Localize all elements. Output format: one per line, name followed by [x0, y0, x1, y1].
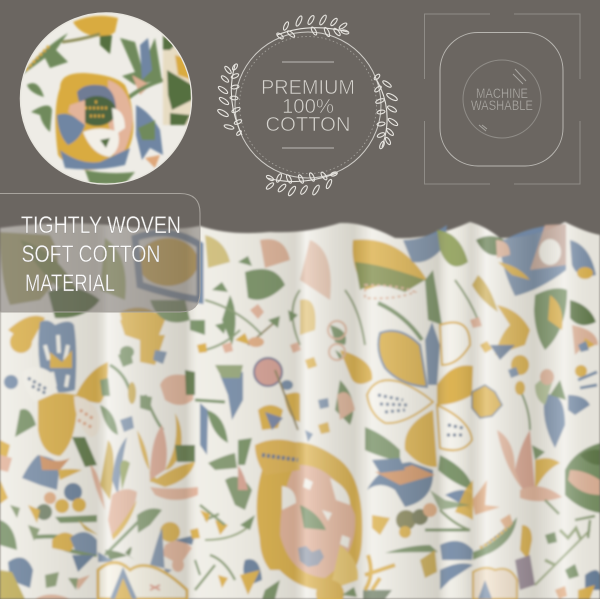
- floral: blue and pink flower bottom centre: [150, 522, 195, 575]
- wreath badge: premium cotton: [217, 14, 399, 197]
- floral: pink spotted leaf: [98, 489, 162, 562]
- badge: inner circle: [463, 60, 541, 138]
- floral: pink bird right: [472, 430, 562, 515]
- close-up: blue leaves right of flower: [136, 105, 163, 160]
- badge: rounded square: [440, 32, 563, 166]
- wreath: text: 100%: [282, 96, 334, 118]
- floral: large pink and yellow peony: [255, 439, 362, 599]
- panel: tightly woven callout: [0, 194, 200, 312]
- floral: ornate flower bottom: [98, 562, 187, 599]
- close-up: main yellow and pink flower: [55, 73, 133, 170]
- badge: text: [471, 86, 533, 113]
- circular fabric close-up: [20, 13, 193, 184]
- floral: bottom right cluster: [363, 480, 600, 599]
- callout text: [21, 212, 181, 297]
- floral: top foliage and blue bloom: [300, 224, 598, 375]
- badge: text: MACHINE: [476, 86, 528, 101]
- callout text: TIGHTLY WOVEN: [21, 212, 181, 239]
- floral: small flowers and green band left: [0, 483, 98, 599]
- floral: blue leaves under lily: [367, 455, 473, 510]
- floral: pink bird centre left: [137, 413, 198, 500]
- wreath: leaves top: [276, 14, 349, 40]
- wreath: leaves right: [373, 73, 399, 149]
- close-up: top yellow flower: [73, 16, 118, 36]
- curtain fold shading: [0, 222, 600, 599]
- floral: large yellow lily: [328, 303, 473, 467]
- wreath: text: COTTON: [266, 114, 350, 136]
- floral: blue and green leaves centre: [195, 365, 252, 510]
- wreath: leaves left: [217, 63, 242, 136]
- floral: purple flower and small blooms: [235, 322, 300, 430]
- close-up: right fold band: [163, 35, 193, 125]
- badge: machine washable: [424, 14, 580, 184]
- floral: blue leaves right: [515, 365, 597, 448]
- floral: green flower right: [565, 443, 600, 513]
- wreath: text: [261, 77, 355, 136]
- badge: outer bracket frame: [424, 14, 580, 184]
- floral: vertical striped stems: [90, 437, 130, 510]
- wreath: leaves bottom: [265, 171, 338, 197]
- callout text: SOFT COTTON: [22, 241, 160, 268]
- callout text: MATERIAL: [25, 270, 115, 297]
- floral: small yellow flower: [472, 385, 502, 418]
- floral: pink flower and stems centre left: [110, 320, 205, 430]
- close-up: right green leaves: [120, 38, 162, 85]
- floral: top band foliage under panel: [0, 232, 331, 345]
- wreath: text: PREMIUM: [261, 77, 355, 99]
- close-up: upper left green leaves: [22, 33, 68, 75]
- floral: sprigs lower middle: [195, 515, 280, 599]
- curtain photo with floral print: [0, 222, 600, 599]
- badge: text: WASHABLE: [471, 98, 533, 113]
- floral: small filler sprigs and buds: [0, 256, 595, 599]
- floral: left lily with blue fan: [4, 321, 118, 490]
- badge: gloss marks: [479, 69, 526, 131]
- wreath: rules: [282, 62, 334, 148]
